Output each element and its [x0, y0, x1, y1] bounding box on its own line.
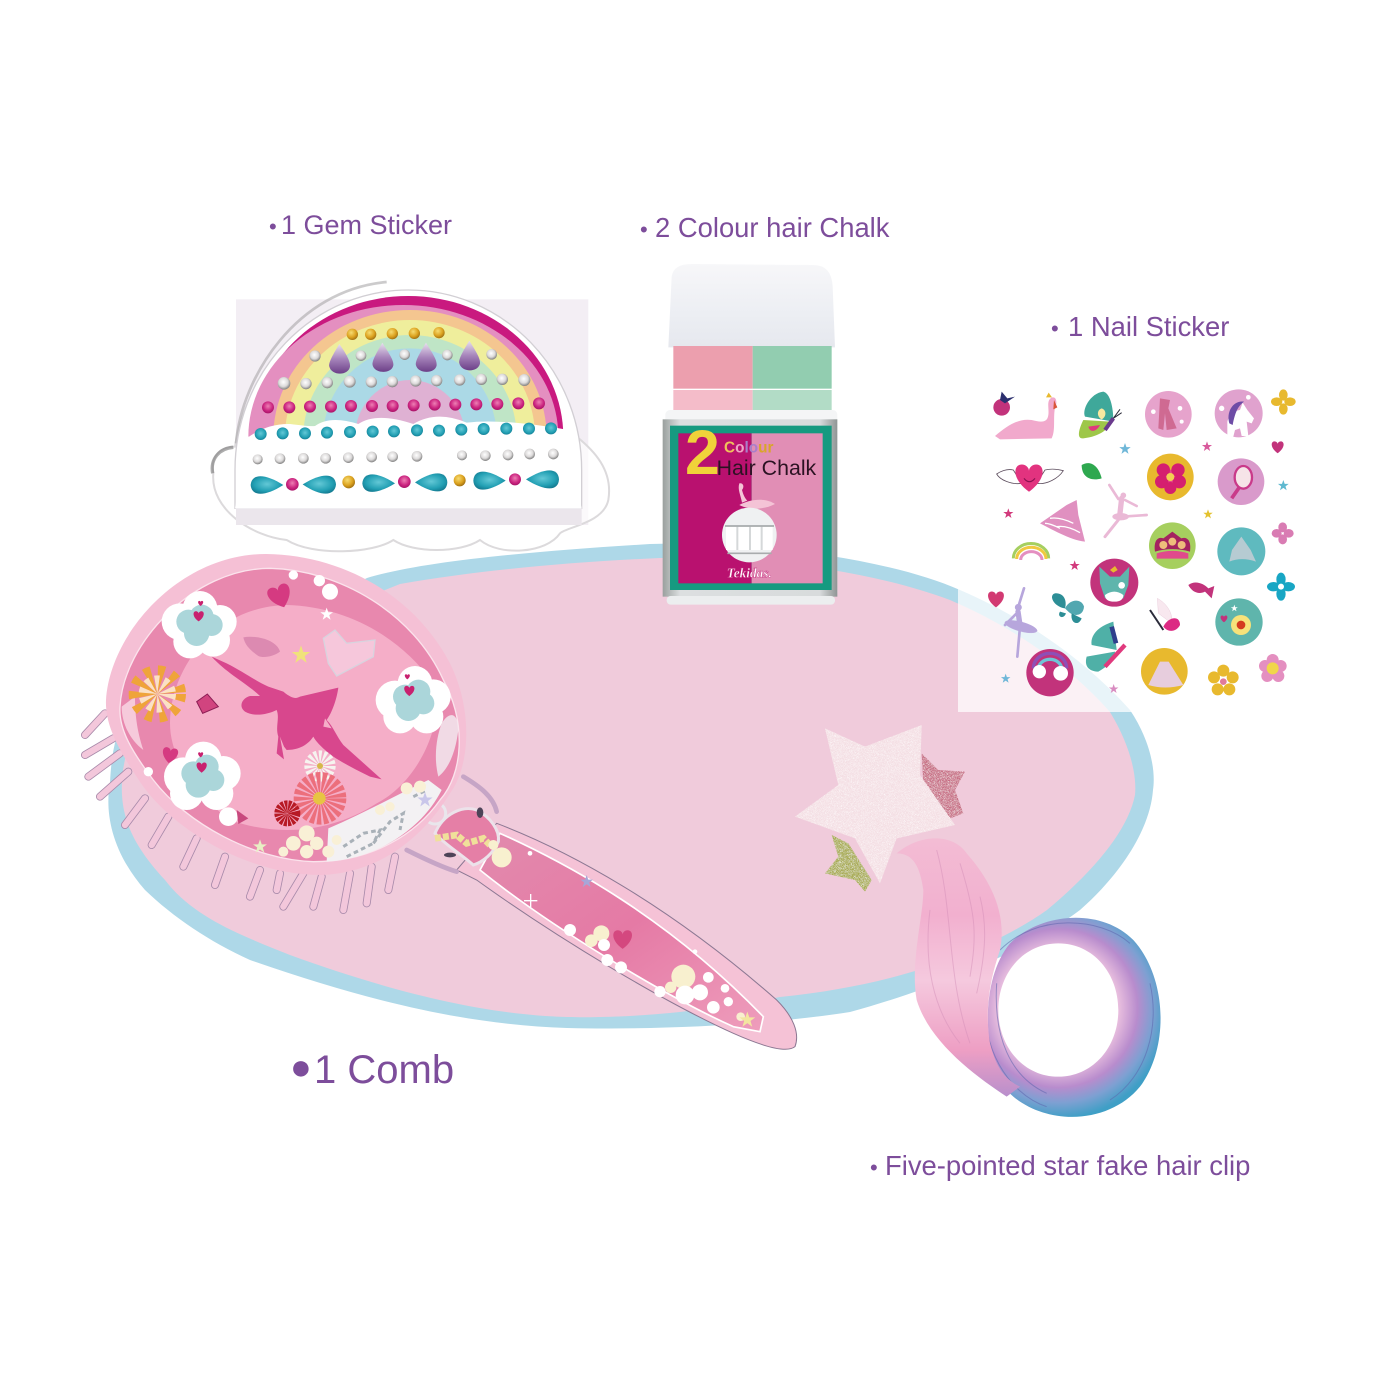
- swan and apple: [993, 392, 1057, 439]
- round stickers: [1026, 389, 1265, 696]
- hearts and fish: [988, 441, 1284, 622]
- ballerina silhouette: [212, 657, 382, 779]
- small rainbow: [1013, 543, 1049, 560]
- rainbow arcs: [248, 296, 563, 437]
- sticker backing card: [236, 299, 588, 525]
- panel: hair chalk stick: [663, 264, 837, 605]
- small green glitter star: [825, 835, 872, 892]
- lavender ballerina silhouette: [1004, 588, 1038, 657]
- leaf: [1082, 463, 1102, 479]
- rose gems: [262, 397, 545, 491]
- flower stickers: [1208, 389, 1296, 695]
- white cloud base: [235, 417, 582, 508]
- sheet background: [958, 355, 1318, 712]
- comb head: [106, 554, 466, 875]
- label: 1 gem sticker: •: [269, 214, 277, 239]
- pink hair strand: [897, 838, 1020, 1097]
- large white glitter star: [795, 725, 955, 883]
- gold gems: [342, 327, 466, 488]
- beads and star glitter: [253, 715, 458, 862]
- coil strands: [986, 923, 1153, 1107]
- purple drop gems: [329, 341, 480, 374]
- label: 1 comb: 1 Comb: [314, 1048, 454, 1092]
- label: five-pointed star fake hair clip: Five-pointed star fake hair clip: [885, 1150, 1250, 1181]
- label: 2 colour hair chalk: 2 Colour hair Chalk: [655, 212, 890, 243]
- handle neck: [407, 777, 497, 872]
- chalk picture: [722, 508, 777, 562]
- panel: hair chalk stick: Hair Chalk: [717, 456, 817, 480]
- silver gems: [253, 349, 559, 464]
- cloud and heart motifs: [162, 591, 451, 810]
- label: 1 nail sticker: 1 Nail Sticker: [1068, 311, 1229, 342]
- head rim: [106, 554, 466, 875]
- label: five-pointed star fake hair clip: •: [870, 1155, 878, 1180]
- panel: hair chalk stick: Colour: [724, 440, 773, 457]
- acrylic cloud outline: [213, 304, 609, 551]
- panel: nail sticker sheet: [958, 355, 1318, 712]
- comb handle: [407, 777, 797, 1049]
- panel: comb: [85, 554, 797, 1049]
- ballgown dress: [1040, 500, 1085, 542]
- sticker art: [1033, 395, 1256, 687]
- butterflies: [1052, 392, 1180, 672]
- background blob: blue and pink oval: [108, 544, 1154, 1028]
- chalk base: [665, 410, 837, 597]
- small pink glitter star: [922, 753, 965, 818]
- stars: [1001, 441, 1289, 693]
- brand mark: Tekidas.: [727, 566, 772, 581]
- label: 2 colour hair chalk: •: [640, 217, 648, 242]
- chalk label text: 2: [685, 418, 720, 488]
- handle beads and heart: [488, 840, 745, 1021]
- flowers: [143, 679, 333, 820]
- label: 1 gem sticker: 1 Gem Sticker: [281, 210, 452, 240]
- label: 1 comb: ●: [290, 1046, 312, 1087]
- head water fill: [120, 568, 459, 862]
- winged heart: [997, 465, 1063, 492]
- small motifs: [144, 570, 375, 826]
- coil of hair: [988, 918, 1161, 1117]
- two colour chalk: [673, 346, 832, 411]
- hair clip: [795, 725, 1161, 1117]
- comb bristles: [85, 713, 395, 910]
- white cap: [668, 264, 835, 347]
- teal gems: [251, 422, 559, 494]
- pink ballerina silhouette: [1105, 485, 1147, 537]
- label: 1 nail sticker: •: [1051, 316, 1059, 341]
- panel: gem sticker: [212, 282, 609, 551]
- label swan: [739, 483, 775, 509]
